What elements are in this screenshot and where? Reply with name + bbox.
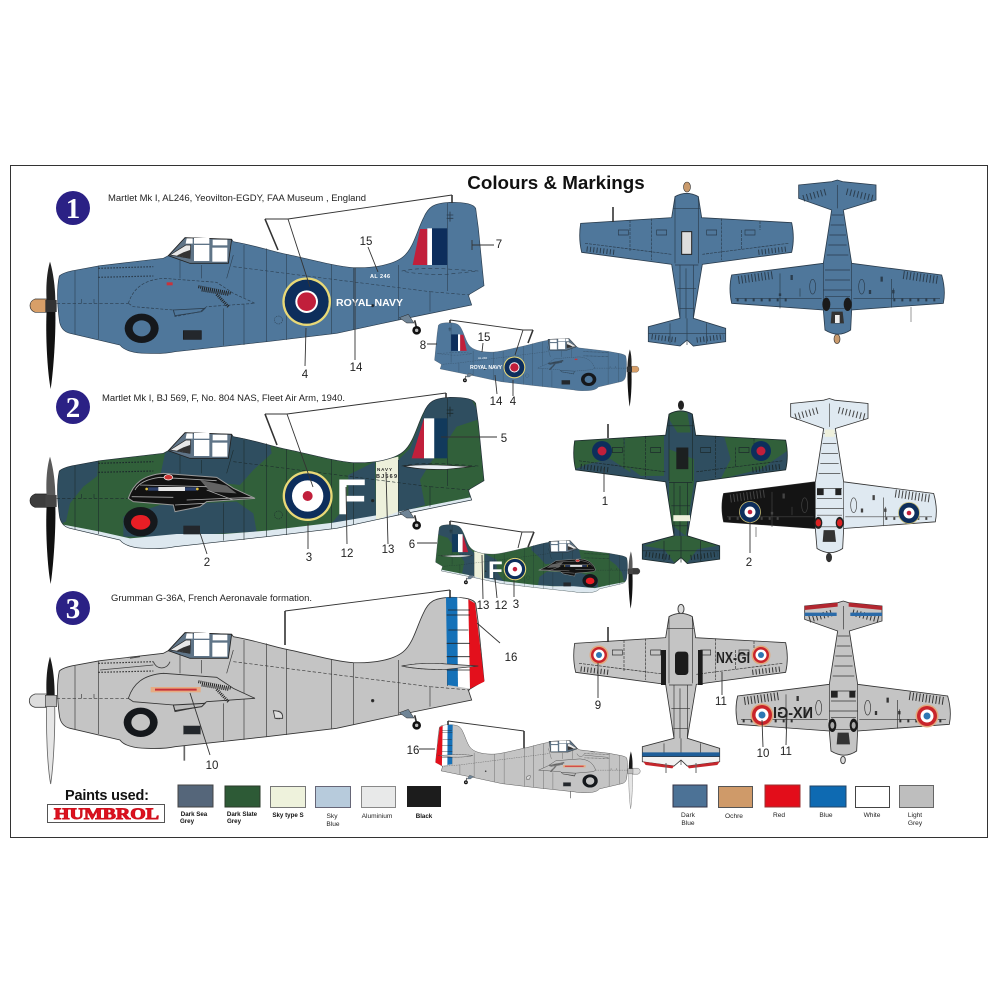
top view 3 callouts: 9 [595, 700, 601, 712]
top view 3 callouts: 11 [715, 696, 727, 708]
bottom view 3 callouts: 10 [757, 748, 769, 760]
small aircraft 1 leaders and callouts: 4 [510, 396, 517, 408]
aircraft 3 small side view [435, 725, 640, 809]
aircraft 2 code text: BJ569 [376, 474, 397, 480]
small aircraft 1 code text [470, 356, 503, 371]
small aircraft 1 leaders and callouts: 15 [478, 332, 490, 344]
aircraft 1 leaders and callouts: 15 [360, 236, 372, 248]
aircraft 2 small side view [434, 524, 640, 609]
swatch legend right: Dark [681, 812, 696, 819]
aircraft 1 small side view [435, 323, 639, 407]
caption 1: Martlet Mk I, AL246, Yeovilton-EGDY, FAA Museum , England [108, 193, 366, 203]
aircraft 2 side view [30, 397, 487, 584]
top view registration: NX-GI [716, 650, 750, 667]
swatch legend left: Black [416, 813, 433, 820]
swatch legend left: Sky [326, 813, 338, 820]
swatch legend left: Grey [180, 818, 195, 825]
aircraft 3 leaders and callouts [190, 590, 517, 772]
swatch legend left: Sky type S [272, 812, 304, 819]
aircraft 3 leaders and callouts: 16 [505, 652, 517, 664]
bottom view 3 callouts: 11 [780, 746, 792, 758]
bottom view 2 callout [746, 522, 752, 569]
aircraft 2 leaders and callouts [200, 393, 507, 569]
aircraft 1 leaders and callouts: 7 [496, 239, 502, 251]
swatch legend left: Grey [227, 818, 242, 825]
aircraft 2 code text: F [336, 469, 367, 525]
bottom view 2 callout: 2 [746, 557, 752, 569]
small aircraft 3 leaders and callouts [407, 721, 524, 757]
aircraft 3 leaders and callouts: 10 [206, 760, 218, 772]
top view aircraft 3 [574, 604, 787, 773]
swatch legend right: Grey [908, 820, 923, 827]
bottom view 3 callouts [757, 712, 792, 760]
swatch legend left [178, 785, 441, 828]
small aircraft 1 code text: AL 246 [478, 356, 487, 360]
aircraft 1 code text: AL 246 [370, 274, 390, 280]
swatch legend right: Ochre [725, 813, 743, 820]
swatch legend left: Aluminium [362, 813, 393, 820]
aircraft 1 leaders and callouts: 14 [350, 362, 363, 374]
aircraft 1 code text [336, 274, 403, 309]
top view 2 callout [602, 468, 608, 508]
title: Colours & Markings [467, 172, 645, 193]
paints used heading: Paints used: [65, 788, 149, 804]
aircraft 2 leaders and callouts: 3 [306, 552, 312, 564]
swatch legend left: Dark Sea [181, 811, 208, 818]
swatch legend right: Blue [819, 812, 833, 819]
caption 2: Martlet Mk I, BJ 569, F, No. 804 NAS, Fleet Air Arm, 1940. [102, 393, 345, 403]
swatch legend right: Blue [681, 820, 695, 827]
small aircraft 2 leaders and callouts: 12 [495, 600, 507, 612]
small aircraft 1 leaders and callouts: 8 [420, 340, 426, 352]
badge 1: 1 [66, 193, 80, 225]
badge 1 [56, 191, 90, 225]
caption 3: Grumman G-36A, French Aeronavale formation. [111, 593, 312, 603]
small aircraft 2 leaders and callouts: 3 [513, 599, 519, 611]
bottom view aircraft 3 [736, 601, 950, 764]
aircraft 1 code text: ROYAL NAVY [336, 297, 403, 309]
small aircraft 1 leaders and callouts: 14 [490, 396, 503, 408]
badge 3: 3 [66, 593, 80, 625]
top view aircraft 1 [580, 182, 793, 346]
swatch legend right: Light [908, 812, 922, 819]
top view 3 callouts [595, 663, 727, 712]
badge 2 [56, 390, 90, 424]
aircraft 2 leaders and callouts: 13 [382, 544, 394, 556]
top view 2 callout: 1 [602, 496, 608, 508]
humbrol logo: HUMBROL [54, 806, 159, 823]
badge 2: 2 [66, 392, 80, 424]
swatch legend right [673, 785, 934, 827]
swatch legend right: White [864, 812, 881, 819]
small aircraft 3 leaders and callouts: 16 [407, 745, 419, 757]
small aircraft 2 leaders and callouts: 13 [477, 600, 489, 612]
aircraft 1 side view [30, 202, 484, 389]
aircraft 2 leaders and callouts: 5 [501, 433, 507, 445]
aircraft 3 side view [29, 597, 484, 784]
swatch legend right: Red [773, 812, 785, 819]
small aircraft 2 leaders and callouts [409, 521, 534, 612]
small aircraft 2 leaders and callouts: 6 [409, 539, 415, 551]
small aircraft 2 code letter: F [488, 557, 503, 584]
small aircraft 1 leaders and callouts [420, 320, 533, 408]
swatch legend left: Dark Slate [227, 811, 258, 818]
aircraft 2 leaders and callouts: 2 [204, 557, 210, 569]
bottom view aircraft 2 [722, 398, 936, 562]
swatch legend left: Blue [326, 821, 340, 828]
bottom view mirrored registration: NX-GI [773, 705, 813, 722]
bottom view aircraft 1 [730, 180, 944, 344]
badge 3 [56, 591, 90, 625]
small aircraft 1 code text: ROYAL NAVY [470, 365, 503, 371]
aircraft 2 leaders and callouts: 12 [341, 548, 353, 560]
aircraft 2 code text [336, 467, 397, 525]
aircraft 1 leaders and callouts: 4 [302, 369, 309, 381]
page frame [10, 166, 988, 838]
humbrol logo [48, 804, 164, 823]
aircraft 2 code text: NAVY [377, 467, 392, 472]
aircraft 1 leaders and callouts [265, 195, 502, 381]
top view aircraft 2 camouflage [571, 400, 787, 563]
